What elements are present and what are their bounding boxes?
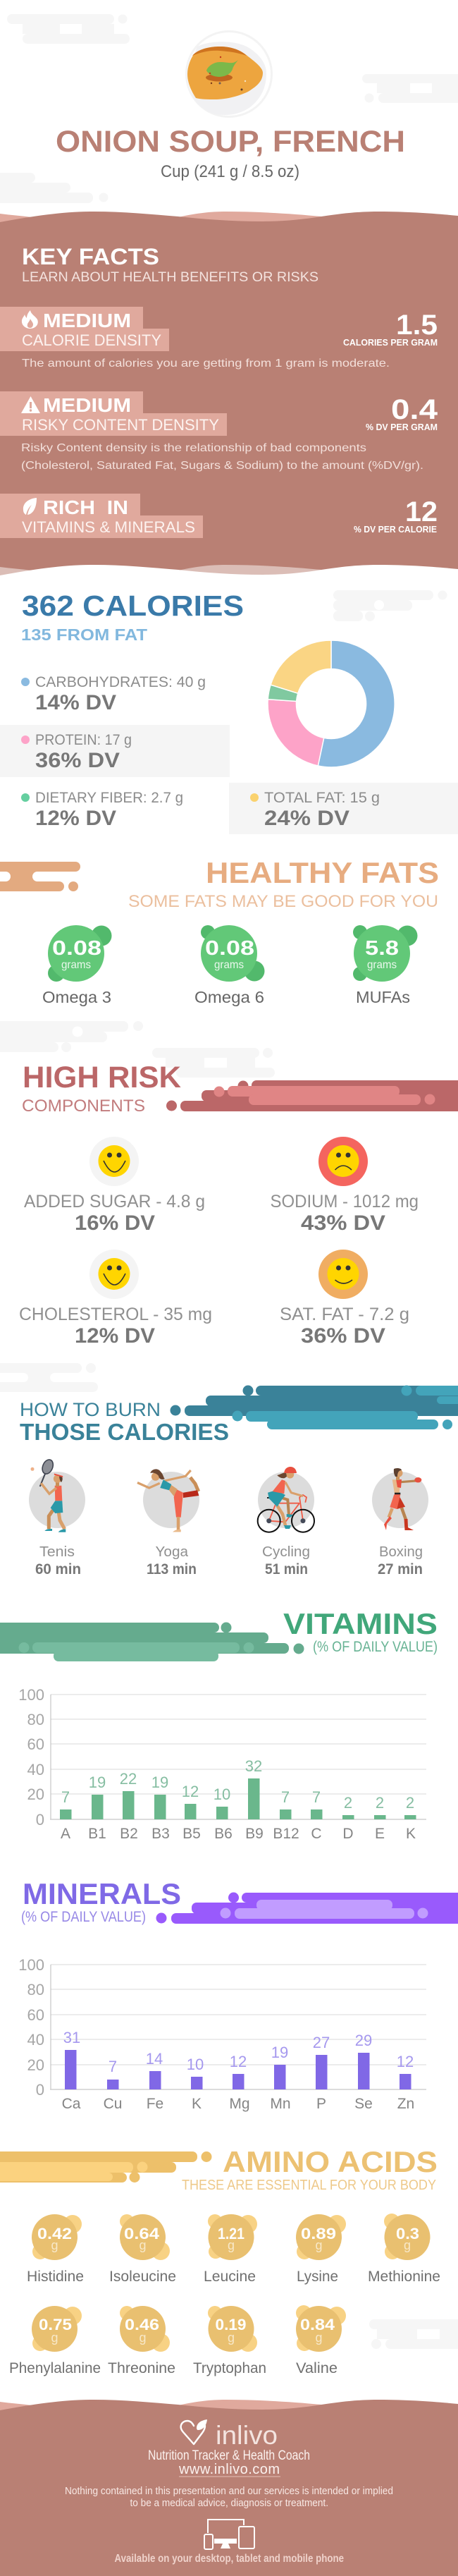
component: cholesterol bbox=[19, 1250, 212, 1348]
component: saturated fat: 36% DV bbox=[301, 1324, 385, 1348]
chart: minerals bar chart: 31 bbox=[63, 2029, 80, 2046]
legend: protein: 36% DV bbox=[35, 749, 120, 772]
amino: histidine: 0.42 bbox=[37, 2225, 72, 2242]
chart: vitamins bar chart: 40 bbox=[27, 1761, 44, 1778]
amino: valine: Valine bbox=[296, 2360, 338, 2376]
amino: methionine: 0.3 bbox=[396, 2225, 419, 2242]
subheading: vitamins: (% OF DAILY VALUE) bbox=[313, 1639, 438, 1655]
icon: warning bbox=[21, 396, 40, 413]
amino: histidine: g bbox=[51, 2238, 58, 2252]
decorative band: healthy fats bbox=[0, 862, 80, 891]
chart: vitamins bar chart: 19 bbox=[89, 1774, 106, 1791]
chart: minerals bar chart: 29 bbox=[355, 2032, 372, 2049]
chart: minerals bar chart: Ca bbox=[62, 2096, 81, 2112]
label: cycling: 51 min bbox=[265, 1561, 308, 1577]
chart: minerals bar chart: 12 bbox=[230, 2053, 247, 2070]
chart: vitamins bar chart: A bbox=[61, 1826, 70, 1842]
chart: vitamins bar chart: 10 bbox=[213, 1786, 230, 1803]
amino: tryptophan bbox=[193, 2306, 266, 2376]
legend: dietary fiber: 12% DV bbox=[35, 807, 116, 830]
chart: vitamins bar chart: 32 bbox=[245, 1757, 262, 1775]
fact: risky content density: Risky Content density is the relationship of bad components bbox=[21, 442, 366, 454]
amino: methionine bbox=[368, 2214, 440, 2285]
heading: high risk: HIGH RISK bbox=[23, 1061, 181, 1094]
icon: flame bbox=[22, 310, 38, 329]
label: tennis bbox=[35, 1544, 81, 1577]
header bbox=[56, 31, 405, 159]
chart: vitamins bar chart: 19 bbox=[151, 1774, 168, 1791]
amino: lysine: 0.89 bbox=[301, 2225, 336, 2242]
chart: vitamins bar chart: B12 bbox=[273, 1826, 299, 1842]
chart: vitamins bar chart: 22 bbox=[120, 1770, 137, 1788]
amino: tryptophan: Tryptophan bbox=[193, 2360, 266, 2376]
fact: rich in vitamins and minerals bbox=[0, 494, 438, 538]
component: added sugar bbox=[24, 1137, 205, 1235]
serving size: Cup (241 g / 8.5 oz) bbox=[161, 162, 299, 181]
legend: carbohydrates: 14% DV bbox=[35, 691, 116, 714]
decorative band: burn bbox=[171, 1385, 458, 1429]
chart: vitamins bar chart: 7 bbox=[281, 1788, 290, 1806]
label: boxing: Boxing bbox=[379, 1544, 423, 1560]
amino: threonine: Threonine bbox=[108, 2360, 175, 2376]
chart: minerals bar chart: 12 bbox=[397, 2053, 414, 2070]
chart: minerals bar chart: Fe bbox=[147, 2096, 163, 2112]
amino: lysine: Lysine bbox=[297, 2269, 338, 2285]
exercise: cycling bbox=[258, 1467, 314, 1532]
availability note: Available on your desktop, tablet and mobile phone bbox=[114, 2553, 344, 2565]
tagline: Nutrition Tracker & Health Coach bbox=[148, 2448, 310, 2463]
legend: total fat: TOTAL FAT: 15 g bbox=[264, 790, 380, 806]
subheading: minerals: (% OF DAILY VALUE) bbox=[21, 1909, 146, 1925]
component: sodium: SODIUM - 1012 mg bbox=[271, 1192, 419, 1211]
logo wordmark: inlivo bbox=[216, 2421, 278, 2450]
heading: those calories: THOSE CALORIES bbox=[20, 1419, 229, 1445]
chart: vitamins bar chart: C bbox=[311, 1826, 322, 1842]
stat: omega 3: 0.08 bbox=[52, 937, 101, 960]
amino: leucine bbox=[204, 2214, 257, 2285]
heading: minerals: MINERALS bbox=[23, 1877, 181, 1910]
chart: minerals bar chart: 27 bbox=[313, 2034, 330, 2051]
title: ONION SOUP, FRENCH bbox=[56, 125, 405, 159]
panel: high risk components bbox=[19, 1061, 458, 1348]
chart: minerals bar chart: 60 bbox=[27, 2006, 44, 2024]
fact: risky content density: RISKY CONTENT DENSITY bbox=[22, 416, 219, 434]
fact: risky content density: 0.4 bbox=[391, 394, 438, 425]
amino: phenylalanine: g bbox=[51, 2331, 58, 2345]
legend: carbohydrates bbox=[21, 674, 206, 714]
amino: methionine: Methionine bbox=[368, 2269, 440, 2285]
chart: vitamins bar chart: 7 bbox=[61, 1788, 70, 1806]
amino: leucine: Leucine bbox=[204, 2269, 256, 2285]
fact: rich in vitamins and minerals: VITAMINS & MINERALS bbox=[22, 518, 195, 536]
fact: risky content density: % DV PER GRAM bbox=[366, 422, 438, 432]
component: added sugar: ADDED SUGAR - 4.8 g bbox=[24, 1192, 205, 1211]
amino: threonine bbox=[108, 2306, 175, 2376]
stat: MUFAs: grams bbox=[367, 959, 397, 971]
component: cholesterol: CHOLESTEROL - 35 mg bbox=[19, 1305, 212, 1324]
heading: amino acids: AMINO ACIDS bbox=[223, 2145, 438, 2178]
decorative band: vitamins bbox=[0, 1622, 304, 1661]
chart: minerals bar chart: Zn bbox=[397, 2096, 414, 2112]
chart: minerals bar chart: Cu bbox=[104, 2096, 122, 2112]
chart: vitamins bar chart: D bbox=[342, 1826, 354, 1842]
decorative band: high risk bbox=[166, 1080, 458, 1111]
chart: minerals bar chart: Mg bbox=[229, 2096, 250, 2112]
amino: valine: 0.84 bbox=[300, 2316, 335, 2333]
legend: carbohydrates: CARBOHYDRATES: 40 g bbox=[35, 674, 206, 690]
exercise: yoga bbox=[137, 1469, 199, 1532]
chart: minerals bar chart: 100 bbox=[18, 1956, 44, 1974]
component: cholesterol: 12% DV bbox=[75, 1324, 155, 1348]
exercise: tennis bbox=[29, 1458, 85, 1532]
disclaimer: to be a medical advice, diagnosis or treatment. bbox=[130, 2497, 328, 2509]
panel: amino acids bbox=[0, 2145, 440, 2376]
chart: minerals bar chart bbox=[18, 1956, 426, 2112]
chart: minerals bar chart: 14 bbox=[146, 2050, 163, 2068]
panel: how to burn calories bbox=[20, 1385, 458, 1577]
component: added sugar: 16% DV bbox=[75, 1211, 155, 1235]
amino: methionine: g bbox=[404, 2238, 411, 2252]
amino: phenylalanine: 0.75 bbox=[39, 2316, 72, 2333]
stat: MUFAs bbox=[353, 925, 417, 1006]
amino: isoleucine bbox=[109, 2214, 176, 2285]
label: yoga bbox=[147, 1544, 197, 1577]
chart: vitamins bar chart: E bbox=[375, 1826, 385, 1842]
amino: tryptophan: g bbox=[228, 2331, 235, 2345]
heading: how to burn: HOW TO BURN bbox=[20, 1399, 161, 1420]
amino: valine bbox=[296, 2305, 346, 2376]
website link: www.inlivo.com bbox=[178, 2462, 280, 2477]
chart: vitamins bar chart: 60 bbox=[27, 1735, 44, 1753]
chart: vitamins bar chart: 12 bbox=[182, 1783, 199, 1800]
subheading: amino acids: THESE ARE ESSENTIAL FOR YOUR BODY bbox=[182, 2178, 436, 2193]
fact: risky content density: (Cholesterol, Saturated Fat, Sugars & Sodium) to the amount (%DV/gr). bbox=[21, 460, 423, 472]
stat: omega 3 bbox=[42, 925, 111, 1006]
heading: vitamins: VITAMINS bbox=[283, 1607, 438, 1640]
component: saturated fat: SAT. FAT - 7.2 g bbox=[280, 1305, 409, 1324]
amino: phenylalanine: Phenylalanine bbox=[9, 2360, 101, 2376]
fact: risky content density bbox=[0, 391, 438, 472]
disclaimer bbox=[65, 2485, 393, 2509]
amino: threonine: g bbox=[139, 2331, 147, 2345]
amino: valine: g bbox=[315, 2331, 323, 2345]
chart: vitamins bar chart: 0 bbox=[36, 1811, 44, 1829]
label: boxing: 27 min bbox=[378, 1561, 423, 1577]
label: tennis: Tenis bbox=[39, 1544, 75, 1560]
heading: healthy fats: HEALTHY FATS bbox=[206, 856, 439, 889]
stat: omega 6: Omega 6 bbox=[194, 988, 264, 1006]
panel: minerals bbox=[18, 1877, 458, 2112]
chart: minerals bar chart: 0 bbox=[36, 2081, 44, 2099]
label: cycling bbox=[262, 1544, 310, 1577]
icon: inlivo heart logo bbox=[181, 2419, 207, 2444]
amino: histidine: Histidine bbox=[27, 2269, 84, 2285]
stat: omega 6: grams bbox=[214, 959, 244, 971]
subheading: components: COMPONENTS bbox=[22, 1097, 145, 1116]
fact: calorie density: CALORIE DENSITY bbox=[22, 331, 161, 349]
label: boxing bbox=[378, 1544, 423, 1577]
component: sodium bbox=[271, 1137, 419, 1235]
chart: vitamins bar chart: B9 bbox=[245, 1826, 264, 1842]
fact: calorie density: MEDIUM bbox=[43, 310, 131, 331]
fact: calorie density: 1.5 bbox=[396, 310, 438, 341]
chart: vitamins bar chart: B6 bbox=[214, 1826, 233, 1842]
chart: macronutrient donut bbox=[268, 640, 395, 767]
legend backgrounds bbox=[0, 725, 458, 834]
chart: minerals bar chart: 7 bbox=[109, 2058, 117, 2075]
panel: healthy fats bbox=[0, 856, 439, 1006]
heading: key facts: KEY FACTS bbox=[22, 244, 159, 269]
label: tennis: 60 min bbox=[35, 1561, 81, 1577]
amino: leucine: 1.21 bbox=[218, 2225, 245, 2242]
amino: lysine: g bbox=[315, 2238, 323, 2252]
chart: minerals bar chart: Se bbox=[354, 2096, 373, 2112]
subheading: calories from fat: 135 FROM FAT bbox=[21, 625, 147, 644]
chart: vitamins bar chart: B5 bbox=[182, 1826, 201, 1842]
fact: risky content density: MEDIUM bbox=[43, 394, 131, 416]
heading: calories: 362 CALORIES bbox=[22, 590, 244, 622]
legend: dietary fiber bbox=[21, 790, 183, 830]
amino: lysine bbox=[296, 2214, 346, 2285]
chart: minerals bar chart: 40 bbox=[27, 2031, 44, 2049]
amino: threonine: 0.46 bbox=[125, 2316, 159, 2333]
chart: vitamins bar chart: 80 bbox=[27, 1711, 44, 1728]
stat: omega 6: 0.08 bbox=[205, 937, 254, 960]
legend: total fat bbox=[250, 790, 380, 830]
stat: omega 3: grams bbox=[61, 959, 91, 971]
label: yoga: Yoga bbox=[155, 1544, 189, 1560]
component: sodium: 43% DV bbox=[301, 1211, 385, 1235]
decorative band: minerals bbox=[156, 1893, 458, 1924]
chart: vitamins bar chart: 2 bbox=[344, 1794, 352, 1812]
panel: key facts bbox=[0, 212, 458, 586]
amino: isoleucine: 0.64 bbox=[124, 2225, 160, 2242]
legend: dietary fiber: DIETARY FIBER: 2.7 g bbox=[35, 790, 183, 806]
chart: minerals bar chart: 10 bbox=[187, 2056, 204, 2073]
disclaimer: Nothing contained in this presentation and our services is intended or implied bbox=[65, 2485, 393, 2497]
amino: histidine bbox=[27, 2214, 84, 2285]
label: yoga: 113 min bbox=[147, 1561, 197, 1577]
amino: leucine: g bbox=[228, 2238, 235, 2252]
fact: calorie density: CALORIES PER GRAM bbox=[343, 337, 438, 348]
amino: isoleucine: Isoleucine bbox=[109, 2269, 176, 2285]
chart: vitamins bar chart: 20 bbox=[27, 1786, 44, 1803]
chart: vitamins bar chart: K bbox=[406, 1826, 416, 1842]
chart: vitamins bar chart: 2 bbox=[406, 1794, 414, 1812]
legend: protein: PROTEIN: 17 g bbox=[35, 732, 132, 748]
chart: minerals bar chart: P bbox=[316, 2096, 326, 2112]
stat: MUFAs: MUFAs bbox=[356, 988, 410, 1006]
chart: vitamins bar chart: B3 bbox=[151, 1826, 170, 1842]
decorative band: amino acids bbox=[0, 2151, 211, 2183]
amino: tryptophan: 0.19 bbox=[216, 2316, 247, 2333]
panel: vitamins bbox=[0, 1607, 438, 1842]
icon: bowl of soup bbox=[186, 31, 272, 117]
chart: vitamins bar chart: 100 bbox=[18, 1686, 44, 1704]
label: cycling: Cycling bbox=[262, 1544, 310, 1560]
chart: minerals bar chart: 19 bbox=[271, 2044, 288, 2061]
panel: calories bbox=[0, 590, 458, 834]
amino: phenylalanine bbox=[9, 2306, 101, 2376]
fact: rich in vitamins and minerals: % DV PER CALORIE bbox=[354, 524, 437, 535]
fact: rich in vitamins and minerals: RICH IN bbox=[43, 496, 128, 518]
chart: vitamins bar chart: B2 bbox=[120, 1826, 138, 1842]
legend: protein bbox=[21, 732, 132, 772]
subheading: healthy fats: SOME FATS MAY BE GOOD FOR YOU bbox=[128, 892, 438, 911]
stat: omega 3: Omega 3 bbox=[42, 988, 111, 1006]
chart: vitamins bar chart: B1 bbox=[88, 1826, 106, 1842]
subheading: key facts: LEARN ABOUT HEALTH BENEFITS OR RISKS bbox=[22, 270, 318, 285]
chart: vitamins bar chart bbox=[18, 1686, 426, 1842]
amino: isoleucine: g bbox=[139, 2238, 147, 2252]
chart: minerals bar chart: 20 bbox=[27, 2056, 44, 2074]
component: saturated fat bbox=[280, 1250, 409, 1348]
legend: total fat: 24% DV bbox=[264, 807, 349, 830]
icon: devices bbox=[204, 2520, 254, 2549]
fact: rich in vitamins and minerals: 12 bbox=[405, 496, 438, 527]
stat: MUFAs: 5.8 bbox=[365, 937, 399, 960]
exercise: boxing bbox=[372, 1468, 428, 1530]
fact: calorie density bbox=[0, 307, 438, 370]
stat: omega 6 bbox=[194, 925, 265, 1006]
chart: minerals bar chart: Mn bbox=[270, 2096, 291, 2112]
icon: leaf bbox=[23, 498, 37, 515]
chart: minerals bar chart: K bbox=[192, 2096, 202, 2112]
fact: calorie density: The amount of calories you are getting from 1 gram is moderate. bbox=[22, 358, 390, 370]
chart: vitamins bar chart: 7 bbox=[312, 1788, 321, 1806]
panel: footer bbox=[0, 2400, 458, 2576]
chart: minerals bar chart: 80 bbox=[27, 1981, 44, 1998]
chart: vitamins bar chart: 2 bbox=[376, 1794, 384, 1812]
